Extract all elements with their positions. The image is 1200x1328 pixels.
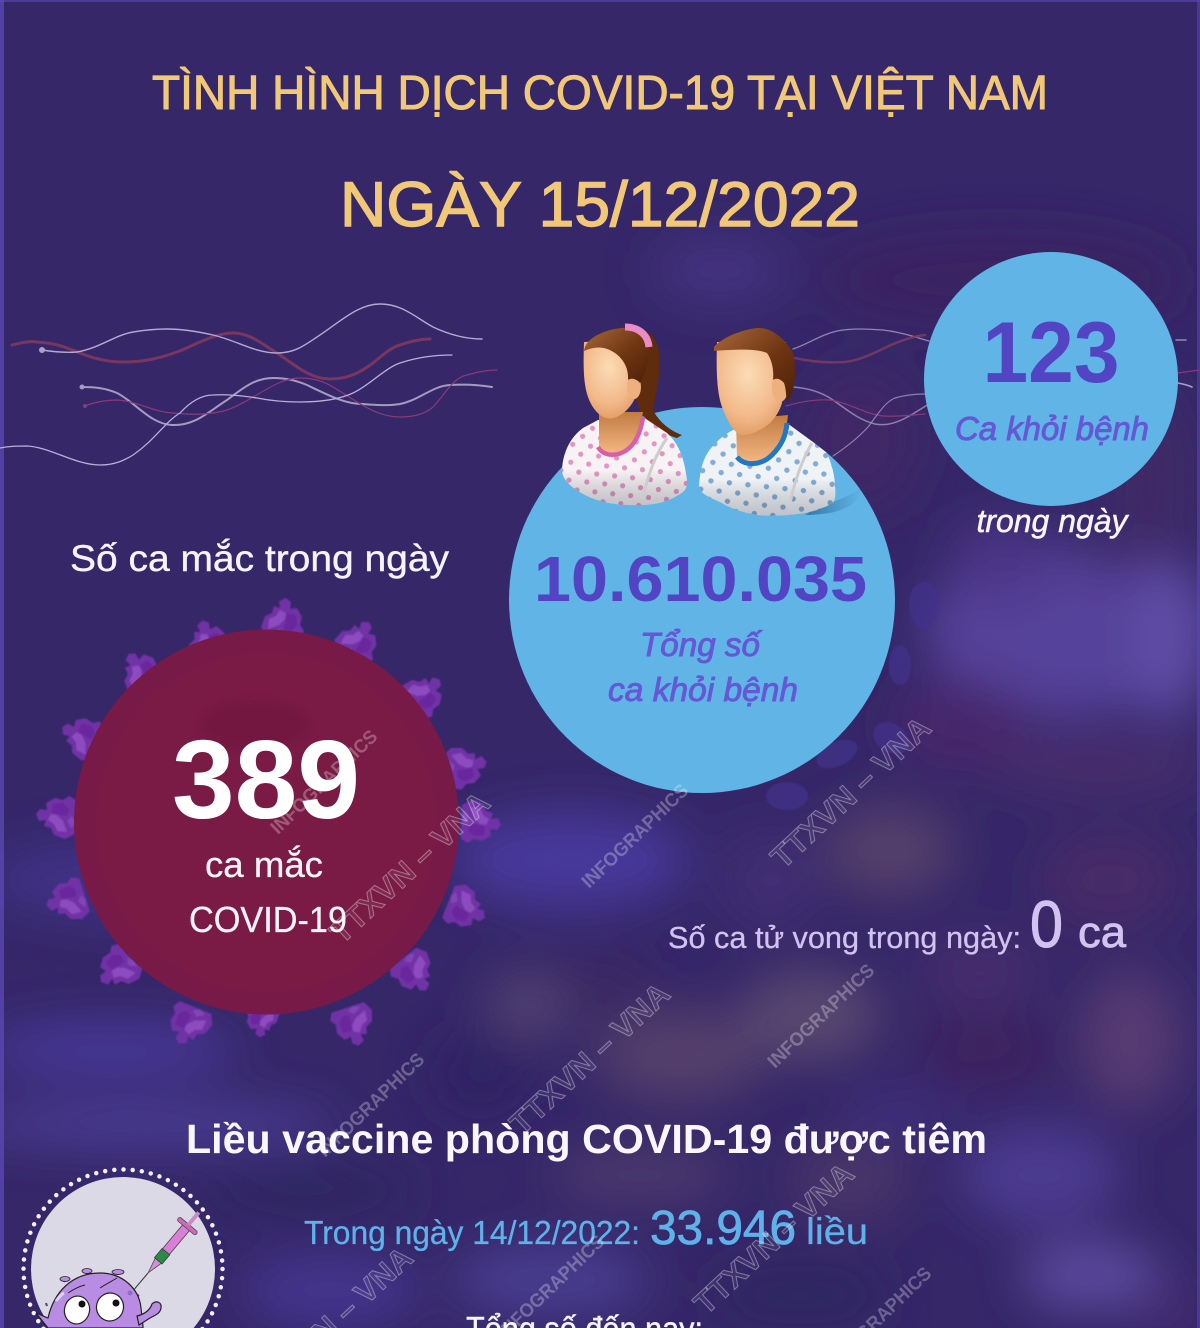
title line 1: TÌNH HÌNH DỊCH COVID-19 TẠI VIỆT NAM [152,66,1048,120]
watermarks [246,710,938,1328]
deaths in day [668,887,1127,961]
daily cases label [189,844,347,940]
total recovered label: Tổng số [640,626,763,663]
watermarks: TTXVN – VNA [503,976,677,1141]
stems [46,1271,139,1306]
upper right lobes [820,235,1180,325]
total recovered number: 10.610.035 [534,543,867,615]
virus character [36,1268,161,1328]
daily cases label: COVID-19 [189,899,347,940]
icon: virus with daily cases [36,598,501,1052]
deaths in day: Số ca tử vong trong ngày: [668,920,1021,955]
icon: female patient [562,327,687,505]
panel: total recovered circle [509,407,895,793]
watermarks: INFOGRAPHICS [764,960,879,1073]
panel: recovered in day circle [924,252,1178,506]
icon: male patient [699,328,862,516]
vaccine doses on 14/12/2022 [304,1202,868,1255]
lower center [450,810,690,910]
total recovered label: ca khỏi bệnh [608,671,798,708]
watermarks: TTXVN – VNA [764,710,938,875]
total recovered label [608,626,798,708]
in day caption: trong ngày [976,503,1129,539]
vaccine doses on 14/12/2022: Trong ngày 14/12/2022: [304,1214,640,1251]
body [36,1273,143,1328]
recovered in day number: 123 [982,305,1120,401]
ponytail [630,328,682,438]
watermarks: INFOGRAPHICS [267,726,382,839]
lower left [0,840,320,920]
daily cases number: 389 [172,718,360,842]
deaths in day: 0 [1030,887,1063,961]
deaths in day: ca [1078,908,1127,957]
virus spikes [36,598,501,1052]
heading: daily cases: Số ca mắc trong ngày [70,538,450,579]
vaccine doses on 14/12/2022: 33.946 [650,1202,796,1255]
watermarks: TTXVN – VNA [687,1156,861,1321]
watermarks: INFOGRAPHICS [578,780,693,893]
watermarks: TTXVN – VNA [323,785,497,950]
decorative wires right [786,329,1200,456]
icon: virus receiving syringe [24,1170,222,1328]
heading: vaccine doses: Liều vaccine phòng COVID-19 được tiêm [186,1116,987,1162]
faded virus silhouette [766,582,939,810]
daily cases label: ca mắc [205,844,323,885]
vaccine doses on 14/12/2022: liều [806,1211,868,1252]
virus body [74,630,459,1014]
recovered in day label: Ca khỏi bệnh [955,410,1149,447]
watermarks: INFOGRAPHICS [314,1049,429,1162]
edge glow [0,0,1200,2]
decorative wires left [0,304,497,465]
title line 2: date: NGÀY 15/12/2022 [340,170,860,240]
syringe [125,1205,208,1298]
